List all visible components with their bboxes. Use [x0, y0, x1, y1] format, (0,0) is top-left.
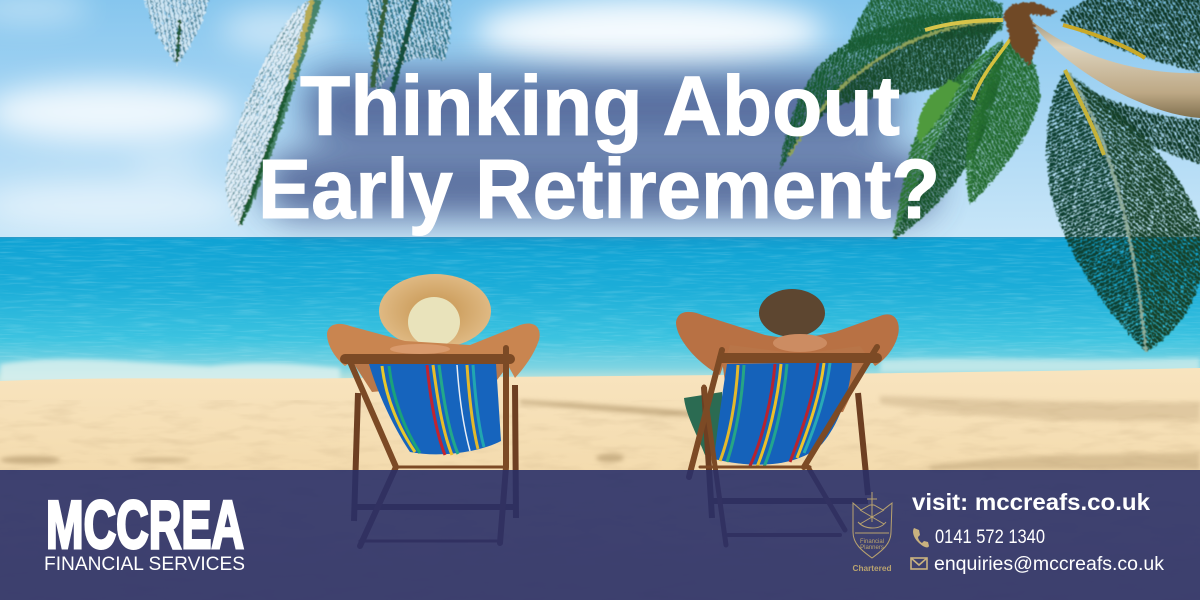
chair frame: [689, 347, 877, 545]
shorts: [684, 392, 724, 455]
man in deck chair: [676, 289, 899, 545]
frond: under trunk: [1090, 90, 1200, 168]
icon: envelope: [911, 558, 927, 569]
palm tree: right: [780, 0, 1200, 352]
frond: lower rib: [1065, 70, 1104, 155]
title: Thinking About: [300, 59, 900, 153]
frond: upper rib: [925, 20, 1003, 30]
chartered financial planners crest: Financial: [860, 539, 884, 545]
frond: long lower: [1046, 70, 1200, 352]
chair frame: [345, 348, 510, 546]
contact details: [911, 489, 1165, 575]
rear legs: [354, 385, 516, 521]
canvas seat: [714, 362, 852, 465]
rear legs: [704, 387, 868, 518]
canvas stripes: [720, 363, 830, 467]
background: sea: [0, 237, 1200, 382]
arms: [676, 312, 899, 375]
email: enquiries@mccreafs.co.uk: [934, 554, 1165, 575]
torso: [720, 345, 875, 420]
frond: top right: [1060, 0, 1200, 75]
head: [759, 289, 825, 337]
canvas seat: [369, 364, 501, 454]
torso: [345, 350, 520, 392]
hands: [773, 334, 827, 352]
sun hat: [379, 274, 491, 348]
title: Early Retirement?: [258, 142, 940, 236]
frond: down left: [893, 37, 1040, 240]
arms: [327, 323, 540, 378]
chartered financial planners crest: [852, 492, 892, 573]
footer band: [0, 470, 1200, 600]
canvas stripes: [382, 365, 484, 455]
frond: down left rib: [972, 37, 1012, 100]
chartered financial planners crest: Planners: [860, 545, 884, 551]
crown: [1003, 2, 1058, 65]
woman in deck chair: [327, 274, 540, 546]
hands: [390, 344, 450, 354]
palm fronds: left: [142, 0, 451, 228]
website: visit: mccreafs.co.uk: [912, 489, 1151, 515]
phone number: 0141 572 1340: [935, 527, 1045, 548]
background: sky: [0, 0, 1200, 240]
logo: FINANCIAL SERVICES: [44, 554, 245, 575]
trunk: [1027, 17, 1200, 118]
frond: top arc: [845, 0, 1003, 55]
logo: MCCREA: [46, 487, 244, 563]
background: sand: [0, 368, 1200, 600]
icon: phone: [913, 528, 929, 547]
logo: [44, 487, 245, 575]
title: [258, 59, 940, 236]
chartered financial planners crest: Chartered: [852, 563, 892, 573]
hat crown: [408, 297, 460, 347]
dark halo behind title: [265, 72, 935, 218]
yellow frond rib: [1063, 25, 1145, 58]
frond: upper left: [780, 12, 1003, 170]
